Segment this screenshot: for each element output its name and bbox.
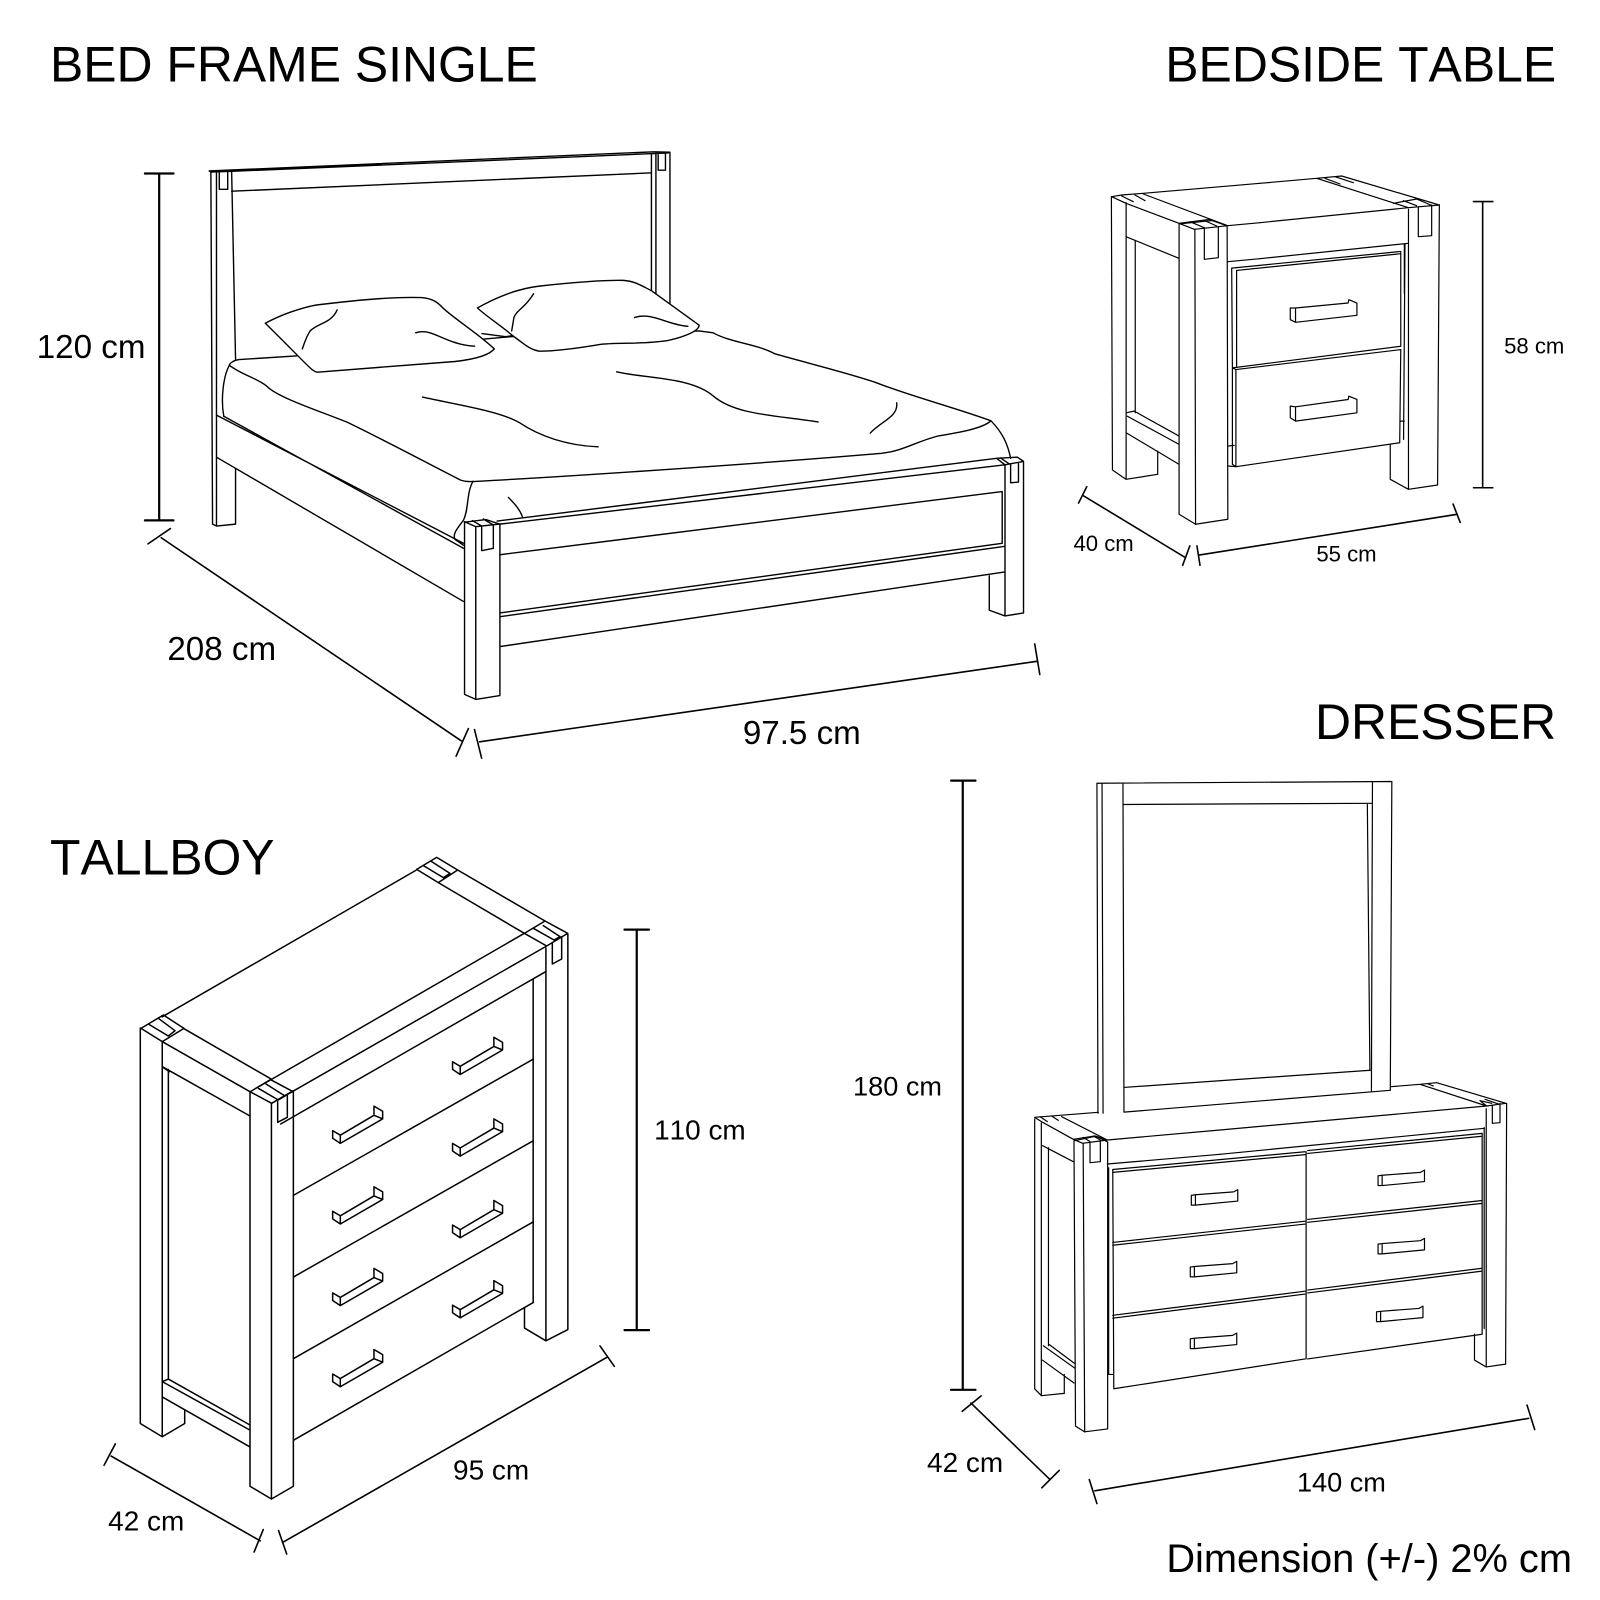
label: 120 cm: 120 cm [37,329,145,366]
heading: dresser: DRESSER [1315,694,1556,750]
foot post [465,520,500,699]
top surface edge [162,870,416,1017]
right post [524,934,568,1341]
table top: right joints [1260,176,1439,293]
right corner of top and joints [1260,176,1439,293]
foot post joint [464,519,500,551]
dimension line: dresser height [951,781,976,1390]
label: 55 cm: 55 cm [1316,542,1377,567]
dimension line: tallboy depth [104,1444,263,1552]
front post [1179,221,1228,524]
left corner of top and joints [1112,183,1260,262]
side panel [1126,240,1179,464]
dimension line: bed width [474,644,1040,758]
top: left and front joints [141,1015,293,1122]
drawers [293,1059,533,1440]
mattress side and sheet folds [222,365,1011,545]
front rail [1228,421,1404,467]
drawers: right column [1306,1133,1482,1359]
left joint and left rail [141,1015,272,1116]
label: 110 cm: 110 cm [654,1114,746,1145]
heading: bed frame single: BED FRAME SINGLE [50,37,538,93]
table top: left joints [1112,183,1260,262]
drawer handle: bottom [1290,396,1357,421]
footboard [497,457,1024,647]
drawer handles: right column [453,1037,503,1318]
illustration: bedside table [1111,176,1439,524]
foot post top and tenon [464,519,500,551]
dresser top: left joints [1035,1112,1220,1164]
dimensions: dresser [853,781,1535,1504]
front post leg edge [1083,1144,1085,1432]
dimension line: dresser width [1089,1405,1535,1504]
mirror [1097,782,1392,1113]
dimension line: table depth [1079,487,1190,565]
label: 140 cm: 140 cm [1297,1466,1386,1497]
left corner of top and joints [1035,1112,1220,1164]
front post leg edge [1194,229,1197,524]
drawers [1232,251,1401,467]
mattress and sheet [229,331,991,482]
label: 40 cm: 40 cm [1073,531,1134,556]
heading: tallboy: TALLBOY [50,829,275,885]
footnote: dimension tolerance: Dimension (+/-) 2% cm [1166,1537,1572,1581]
dimensions: tallboy [104,930,746,1554]
front post [250,1080,293,1499]
dimension line: bed height [145,173,173,520]
front post leg edge [270,1104,272,1499]
foot post leg edge [475,527,477,699]
dimension line: tallboy height [624,930,649,1330]
pillow: right [477,280,699,351]
dimension line: table height [1473,202,1493,488]
dimension line: table width [1197,504,1460,565]
dimensions: bed frame [37,173,1040,758]
label: 42 cm: 42 cm [927,1447,1003,1478]
sheet wrinkles [422,372,897,447]
right post [1474,1104,1507,1367]
illustration: dresser [1035,782,1507,1432]
dimension line: tallboy width [279,1346,614,1554]
headboard [209,152,670,526]
drawer handles: left column [1190,1190,1238,1349]
label: 180 cm: 180 cm [853,1070,942,1101]
dimension line: bed length [148,529,468,756]
right post [1390,205,1439,489]
label: 208 cm: 208 cm [167,631,276,668]
label: 95 cm: 95 cm [453,1455,529,1486]
drawer handles: left column [333,1106,383,1387]
drawer handle: top [1290,300,1357,322]
drawers: left column [1109,1152,1305,1389]
illustration: tallboy [140,857,568,1499]
side rail [216,415,463,601]
front post [1074,1136,1108,1432]
left post and side panel [1035,1119,1076,1396]
left post and side panel [140,1028,250,1447]
left back post [1111,197,1158,479]
gap between pillows [482,334,514,337]
drawer handles: right column [1377,1170,1424,1322]
dresser top: right joints [1220,1083,1506,1154]
back joint and back rail [417,857,545,933]
pillow: left [265,297,494,372]
right corner of top and joints [1220,1083,1506,1154]
front post top and tenon [250,1084,293,1122]
dimension line: dresser depth [962,1396,1059,1488]
label: 58 cm: 58 cm [1504,334,1564,359]
right post top and tenon [260,921,568,1124]
label: 42 cm: 42 cm [108,1506,184,1537]
top: back and right joints [260,857,568,1124]
heading: bedside table: BEDSIDE TABLE [1165,37,1556,93]
illustration: bed frame [209,152,1024,699]
label: 97.5 cm: 97.5 cm [743,715,861,752]
dimensions: bedside table [1073,202,1564,567]
